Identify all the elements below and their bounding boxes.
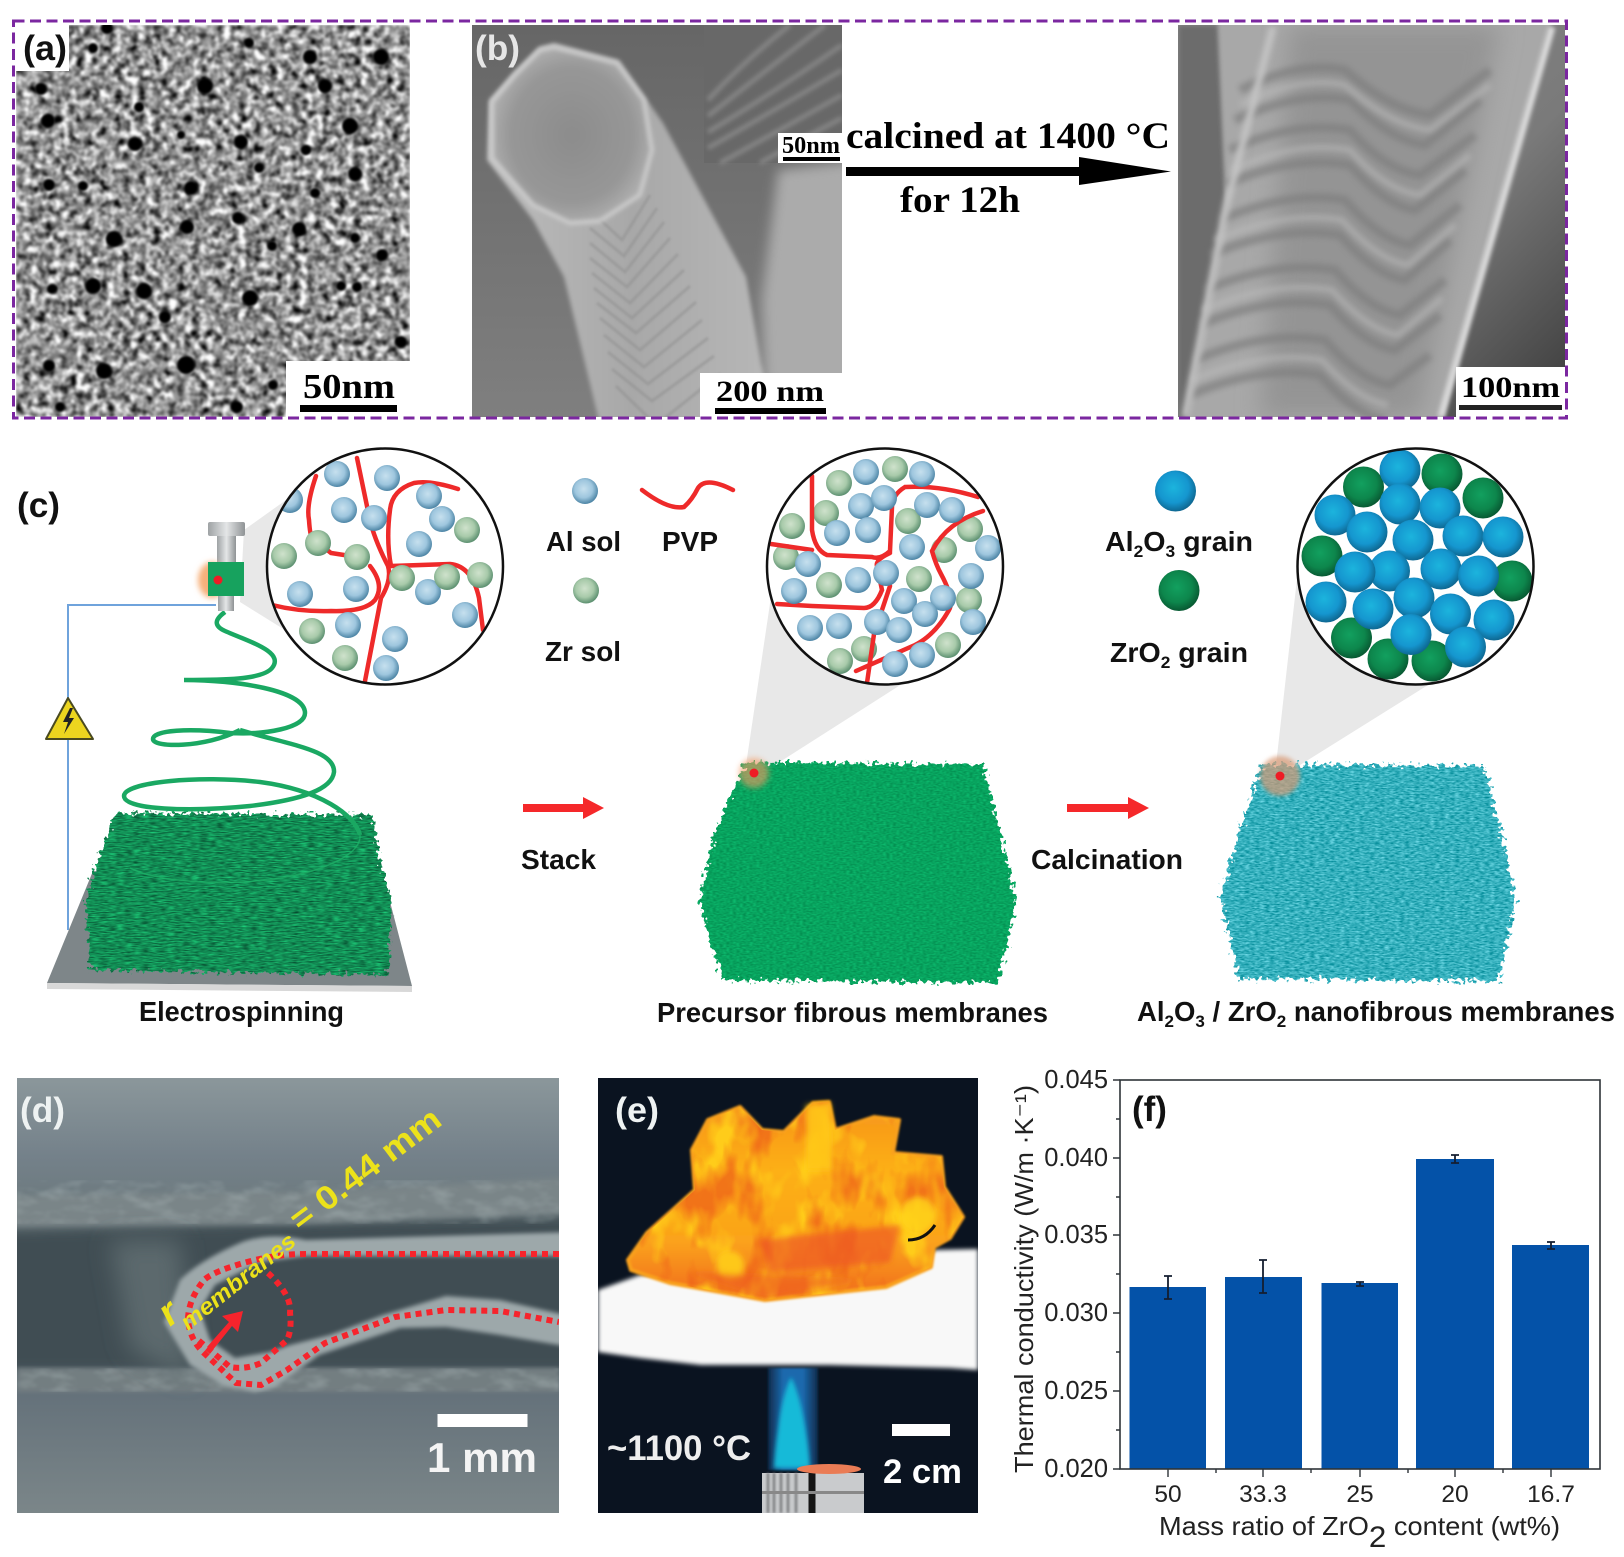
legend: Zr sol: Zr sol (545, 636, 621, 667)
panel border: dashed purple frame (14, 21, 1566, 418)
spinneret nozzle (198, 522, 245, 611)
wiring: high voltage circuit (68, 605, 216, 930)
magnified circle: precursor membrane (767, 448, 1003, 690)
icon: high voltage warning (46, 698, 93, 739)
y-axis tick labels (1044, 1066, 1108, 1483)
temperature label: ~1100 °C (607, 1429, 751, 1468)
legend: Zr sol (545, 578, 621, 667)
legend: Al2O3 grain (1105, 470, 1253, 561)
zoom cone: precursor (746, 590, 905, 765)
x-axis title: 2 (1369, 1521, 1386, 1554)
zoom cone: calcined (1276, 570, 1428, 765)
y-axis tick labels: 0.030 (1044, 1299, 1108, 1327)
label: Al2O3 / ZrO2 nanofibrous membranes: O (1174, 996, 1195, 1027)
ceramic blanket (598, 1249, 978, 1370)
y-axis tick labels: 0.040 (1044, 1144, 1108, 1172)
fold: membrane body (164, 1232, 570, 1392)
label (a) (16, 25, 69, 71)
arrow: calcination: Calcination (1031, 844, 1183, 875)
x-axis tick labels (1154, 1481, 1575, 1508)
green fibre stack: electrospinning (86, 813, 392, 975)
label: Precursor fibrous membranes: Precursor fibrous membranes (657, 997, 1048, 1028)
scale bar: 2 cm (883, 1424, 962, 1491)
burner nozzle (762, 1464, 864, 1513)
bars (1130, 1159, 1589, 1469)
label (d): (d) (20, 1091, 65, 1130)
panel: calcined SEM image (1178, 20, 1565, 425)
legend: Al2O3 grain: 2 (1134, 542, 1143, 561)
y-axis tick labels: 0.020 (1044, 1455, 1108, 1483)
label: Al2O3 / ZrO2 nanofibrous membranes: Al (1137, 996, 1164, 1027)
scale cutout: 50nm: 50nm (303, 367, 395, 406)
sampling spot: precursor (739, 758, 769, 788)
chart: thermal conductivity bars (f) (1009, 1066, 1600, 1554)
arrow: stack (521, 797, 604, 875)
label: Al2O3 / ZrO2 nanofibrous membranes: 2 (1277, 1012, 1286, 1031)
legend: Al sol: Al sol (546, 526, 621, 557)
magnified circle: calcined grains (1298, 448, 1534, 684)
annotation: r membranes = 0.44 mm: membranes (175, 1227, 301, 1335)
green fibre stack: precursor membrane (699, 762, 1016, 983)
legend: Al2O3 grain: 3 (1165, 542, 1175, 561)
label: Electrospinning: Electrospinning (139, 996, 344, 1027)
teal fibre stack: calcined membrane (1220, 764, 1516, 981)
scale bar: 1 mm: 1 mm (427, 1434, 537, 1481)
arrow: stack: Stack (521, 844, 597, 875)
y-axis tick labels: 0.035 (1044, 1221, 1108, 1249)
label: Al2O3 / ZrO2 nanofibrous membranes: 2 (1165, 1012, 1174, 1031)
sampling spot: calcined (1260, 756, 1300, 796)
y-axis title: Thermal conductivity (W/m ·K⁻¹) (1009, 1085, 1039, 1473)
label: Al2O3 / ZrO2 nanofibrous membranes: / ZrO (1205, 996, 1277, 1027)
label: Al2O3 / ZrO2 nanofibrous membranes: 3 (1195, 1012, 1205, 1031)
label (b): (b) (475, 29, 520, 68)
y-axis tick labels: 0.025 (1044, 1377, 1108, 1405)
scale bar: 1 mm (427, 1414, 537, 1481)
legend: Al2O3 grain: grain (1175, 526, 1253, 557)
arrow: calcination (1031, 797, 1183, 875)
glowing flower (628, 1102, 963, 1300)
scale cutout: 200 nm: 200 nm (716, 375, 824, 408)
legend: Al2O3 grain: Al (1105, 526, 1133, 557)
arrow: radius (207, 1311, 243, 1351)
label (a): (a) (23, 29, 67, 68)
burner flame (768, 1368, 818, 1470)
x-axis tick labels: 25 (1346, 1481, 1374, 1508)
x-axis tick labels: 16.7 (1527, 1481, 1575, 1508)
legend: Al sol (546, 478, 621, 557)
legend: ZrO2 grain: 2 (1161, 653, 1170, 672)
zoom cone: nozzle to circle (240, 490, 300, 630)
x-axis tick labels: 50 (1154, 1481, 1182, 1508)
y-axis tick labels: 0.045 (1044, 1066, 1108, 1094)
panel: SEM image of fiber (b) (472, 25, 860, 425)
x-axis title: content (wt%) (1386, 1511, 1560, 1541)
arrow: calcined at 1400 °C for 12h: for 12h (900, 180, 1020, 221)
magnified circle: precursor sol in jet (267, 448, 503, 684)
label: Al2O3 / ZrO2 nanofibrous membranes: nanofibrous membranes (1286, 996, 1615, 1027)
legend: PVP (642, 482, 733, 557)
annotation: r membranes = 0.44 mm: = 0.44 mm (282, 1100, 448, 1238)
axes and ticks (1113, 1080, 1600, 1477)
scale cutout: 200 nm (700, 373, 842, 418)
electrospinning plate (47, 871, 412, 992)
label (c): (c) (17, 486, 60, 525)
legend: ZrO2 grain: ZrO (1110, 637, 1160, 668)
panel: TEM image (a) (16, 22, 411, 418)
legend: ZrO2 grain (1110, 570, 1248, 672)
arrow: calcined at 1400 °C for 12h (846, 116, 1171, 221)
red dotted outline (188, 1254, 559, 1385)
annotation: r membranes = 0.44 mm (150, 1100, 448, 1335)
spun fibre jet spiral (124, 612, 360, 882)
scale cutout: 100nm: 100nm (1461, 371, 1560, 404)
inset scale: 50nm: 50nm (782, 133, 840, 159)
scale bar: 2 cm: 2 cm (883, 1453, 962, 1491)
error bars (1164, 1155, 1555, 1299)
legend: ZrO2 grain: grain (1170, 637, 1248, 668)
x-axis tick labels: 20 (1441, 1481, 1469, 1508)
scale cutout: 50nm (286, 361, 411, 418)
label (f): (f) (1132, 1090, 1167, 1129)
legend: Al2O3 grain: O (1143, 526, 1165, 557)
arrow: calcined at 1400 °C for 12h: calcined at 1400 °C (846, 116, 1170, 157)
label (e): (e) (615, 1091, 659, 1130)
x-axis tick labels: 33.3 (1239, 1481, 1287, 1508)
scale cutout: 100nm (1456, 367, 1565, 417)
annotation: r membranes = 0.44 mm: r (150, 1291, 189, 1334)
panel: flame test photo (e) (598, 1078, 978, 1513)
panel: SEM folded membrane (d) (0, 1078, 600, 1513)
x-axis title: Mass ratio of ZrO (1159, 1511, 1360, 1541)
legend: PVP: PVP (662, 526, 718, 557)
